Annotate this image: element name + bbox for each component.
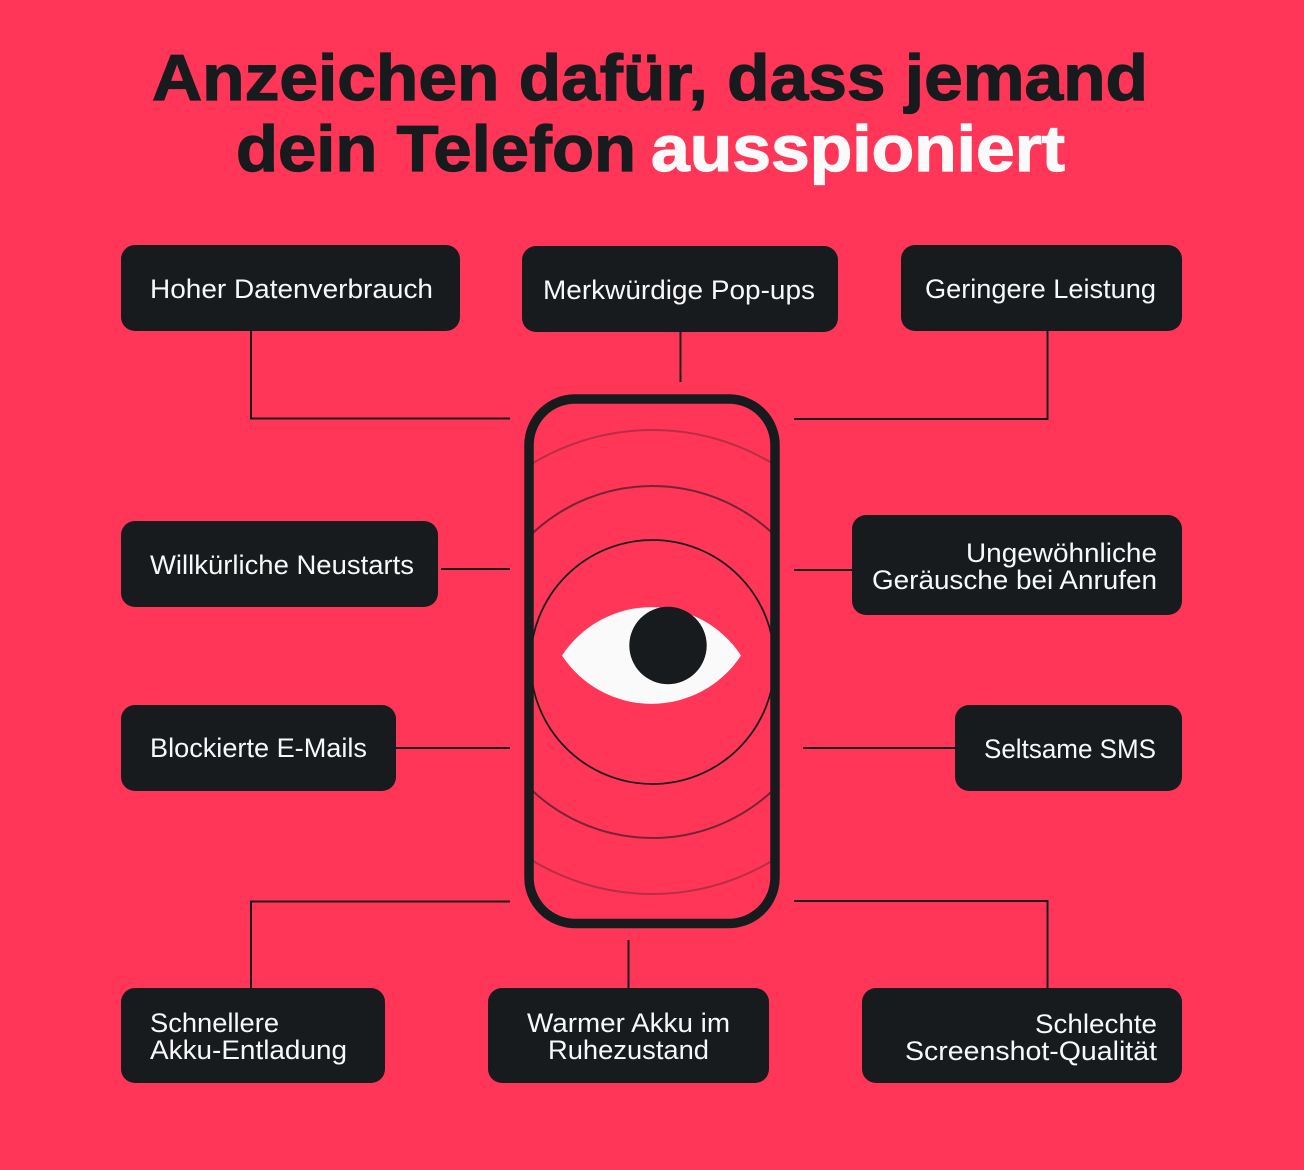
connector: Schnellere Akku-Entladung (251, 902, 510, 988)
box: Ungewöhnliche Geräusche bei Anrufen: Ungewöhnliche (966, 538, 1157, 568)
phone frame (529, 399, 775, 924)
box: Geringere Leistung: Geringere Leistung (925, 274, 1156, 304)
box: Schlechte Screenshot-Qualität (862, 988, 1182, 1083)
title: Anzeichen dafür, dass jemand (152, 41, 1148, 114)
box: Hoher Datenverbrauch (121, 245, 460, 331)
connector: Willkürliche Neustarts (441, 568, 510, 570)
box: Schnellere Akku-Entladung: Akku-Entladung (150, 1035, 347, 1065)
box: Blockierte E-Mails: Blockierte E-Mails (150, 733, 367, 763)
box: Schnellere Akku-Entladung (121, 988, 385, 1083)
title: dein Telefon (236, 112, 636, 185)
connector: Schlechte Screenshot-Qualität (794, 901, 1048, 988)
box: Willkürliche Neustarts: Willkürliche Neustarts (150, 550, 414, 580)
box: Hoher Datenverbrauch: Hoher Datenverbrauch (150, 274, 433, 304)
connector: Warmer Akku (628, 940, 630, 988)
connector: Geringere Leistung (794, 331, 1048, 419)
icon: eye (562, 607, 741, 704)
box: Seltsame SMS: Seltsame SMS (984, 734, 1156, 764)
signal rings (534, 429, 770, 895)
title: ausspioniert (651, 112, 1065, 185)
connector: Hoher Datenverbrauch (251, 331, 510, 418)
box: Warmer Akku im Ruhezustand: Ruhezustand (548, 1035, 709, 1065)
connector: Ungewöhnliche Geräusche (794, 569, 852, 571)
box: Merkwürdige Pop-ups (522, 246, 838, 332)
box: Schnellere Akku-Entladung: Schnellere (150, 1008, 279, 1038)
box: Geringere Leistung (901, 245, 1182, 331)
box: Blockierte E-Mails (121, 705, 396, 791)
box: Warmer Akku im Ruhezustand (488, 988, 769, 1083)
box: Ungewöhnliche Geräusche bei Anrufen (852, 515, 1182, 615)
box: Willkürliche Neustarts (121, 521, 438, 607)
box: Schlechte Screenshot-Qualität: Schlechte (1035, 1009, 1157, 1039)
box: Schlechte Screenshot-Qualität: Screenshot-Qualität (905, 1036, 1158, 1066)
box: Ungewöhnliche Geräusche bei Anrufen: Geräusche bei Anrufen (872, 565, 1157, 595)
box: Warmer Akku im Ruhezustand: Warmer Akku im (527, 1008, 730, 1038)
phone illustration (524, 394, 780, 928)
title (152, 41, 1148, 185)
connector: Merkwürdige Pop-ups (680, 332, 682, 382)
box: Merkwürdige Pop-ups: Merkwürdige Pop-ups (543, 275, 815, 305)
connector: Seltsame SMS (803, 747, 955, 749)
connector: Blockierte E-Mails (396, 747, 510, 749)
box: Seltsame SMS (955, 705, 1182, 791)
